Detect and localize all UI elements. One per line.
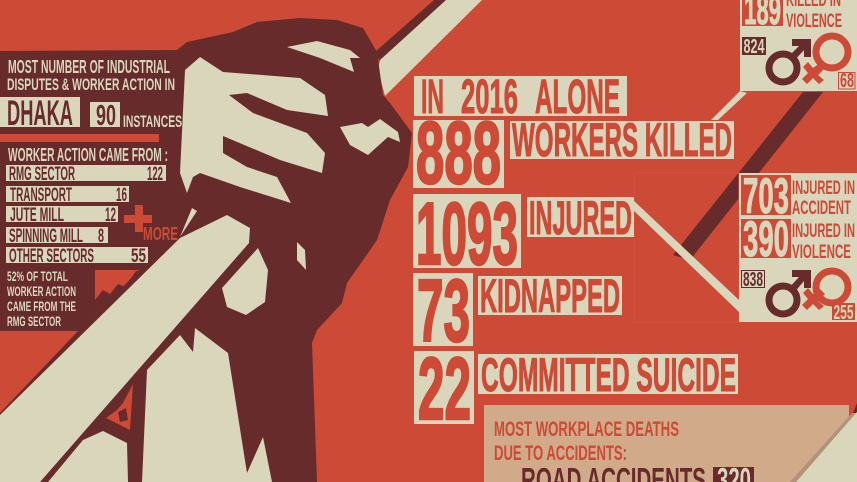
red gap below pole bbox=[106, 384, 133, 430]
bar: jute mill: 12 bbox=[105, 205, 116, 226]
stat: 703 injured in accident: 703 bbox=[743, 168, 789, 224]
90 instances: 90 bbox=[96, 100, 116, 132]
icon: male 824: 824 bbox=[744, 36, 765, 58]
illustration: raised fist holding pole bbox=[0, 0, 482, 482]
stat: 73 kidnapped: KIDNAPPED bbox=[480, 269, 620, 322]
finger sliver bbox=[180, 208, 197, 237]
heading: in 2016 alone: IN bbox=[421, 71, 444, 124]
corner fold bbox=[790, 403, 857, 482]
bar: other sectors: 55 bbox=[131, 246, 146, 267]
bar: transport: 16 bbox=[116, 185, 127, 206]
forearm bbox=[142, 328, 272, 482]
icon: male 838: 838 bbox=[743, 269, 763, 291]
knuckle highlight bbox=[340, 119, 400, 155]
stat: 73 kidnapped: 73 bbox=[417, 261, 470, 360]
heading: in 2016 alone bbox=[414, 71, 627, 124]
stat: 22 committed suicide bbox=[414, 339, 738, 438]
sector heading: WORKER ACTION CAME FROM : bbox=[8, 145, 168, 165]
stat: 888 workers killed bbox=[413, 103, 734, 202]
note: RMG share: CAME FROM THE bbox=[7, 298, 76, 314]
90 instances: INSTANCES bbox=[123, 113, 182, 131]
bar: other sectors: OTHER SECTORS bbox=[9, 246, 94, 267]
divider bar bbox=[0, 134, 159, 142]
icon: plus more: MORE bbox=[143, 224, 178, 244]
heading: in 2016 alone: ALONE bbox=[535, 71, 620, 124]
palm highlight bbox=[222, 248, 268, 315]
icon: male 838 bbox=[742, 269, 811, 314]
main pole bbox=[0, 215, 250, 482]
Dhaka label bbox=[0, 94, 80, 133]
jagged edge beside note panel bbox=[95, 271, 139, 316]
bar: spinning mill: SPINNING MILL bbox=[9, 226, 83, 247]
panel background bbox=[484, 405, 849, 482]
note: RMG share: WORKER ACTION bbox=[7, 283, 76, 299]
pattern inside red gap bbox=[118, 408, 128, 422]
card background bbox=[739, 173, 857, 322]
connector: killed card bbox=[711, 91, 747, 120]
stat: 888 workers killed: 888 bbox=[416, 103, 501, 202]
stat: 390 injured in violence: 390 bbox=[743, 211, 789, 267]
icon: female 255 bbox=[802, 271, 855, 324]
heading: DUE TO ACCIDENTS: bbox=[494, 442, 627, 465]
stat: 1093 injured: INJURED bbox=[529, 191, 632, 244]
upper pole bbox=[375, 0, 482, 96]
red gap below note panel bbox=[0, 331, 75, 393]
stat: 22 committed suicide: 22 bbox=[418, 339, 471, 438]
bar: spinning mill: 8 bbox=[98, 226, 104, 247]
stat: 73 kidnapped bbox=[413, 261, 622, 360]
bar: transport: TRANSPORT bbox=[10, 185, 72, 206]
panel: workplace death causes bbox=[484, 405, 849, 482]
bar: spinning mill bbox=[6, 226, 108, 247]
note: RMG share: RMG SECTOR bbox=[7, 313, 61, 329]
heading bbox=[7, 57, 175, 94]
thumb highlight bbox=[287, 41, 360, 72]
red gap beside note panel bbox=[95, 270, 139, 316]
bar: jute mill: JUTE MILL bbox=[10, 205, 64, 226]
fist and arm silhouette bbox=[0, 18, 412, 482]
wrist sliver bbox=[297, 242, 306, 270]
heading bbox=[494, 418, 679, 465]
heading: MOST NUMBER OF INDUSTRIAL bbox=[8, 57, 170, 77]
panel: Dhaka disputes bbox=[0, 57, 182, 329]
heading: DISPUTES & WORKER ACTION IN bbox=[7, 75, 175, 94]
card background bbox=[740, 0, 857, 91]
bar: RMG sector: RMG SECTOR bbox=[9, 164, 75, 185]
stat: 1093 injured: 1093 bbox=[416, 184, 518, 283]
heading: MOST WORKPLACE DEATHS bbox=[494, 418, 679, 441]
icon: plus more bbox=[124, 205, 178, 244]
note: RMG share: 52% OF TOTAL bbox=[7, 268, 68, 284]
panel: 2016 casualty figures bbox=[413, 71, 738, 438]
90 instances bbox=[90, 100, 182, 132]
card: killed breakdown bbox=[740, 0, 857, 92]
Dhaka label: DHAKA bbox=[7, 94, 73, 133]
faint outline: injured connector area bbox=[634, 173, 739, 322]
note: RMG share bbox=[7, 268, 76, 329]
connector: injured card bbox=[633, 200, 739, 312]
heading: in 2016 alone: 2016 bbox=[461, 71, 518, 124]
fingers bbox=[180, 57, 328, 203]
card: injured breakdown bbox=[739, 168, 857, 324]
lower sleeve bbox=[48, 431, 128, 482]
diagonal stripe: right side pole bbox=[673, 92, 823, 260]
bar: RMG sector: 122 bbox=[147, 164, 163, 185]
